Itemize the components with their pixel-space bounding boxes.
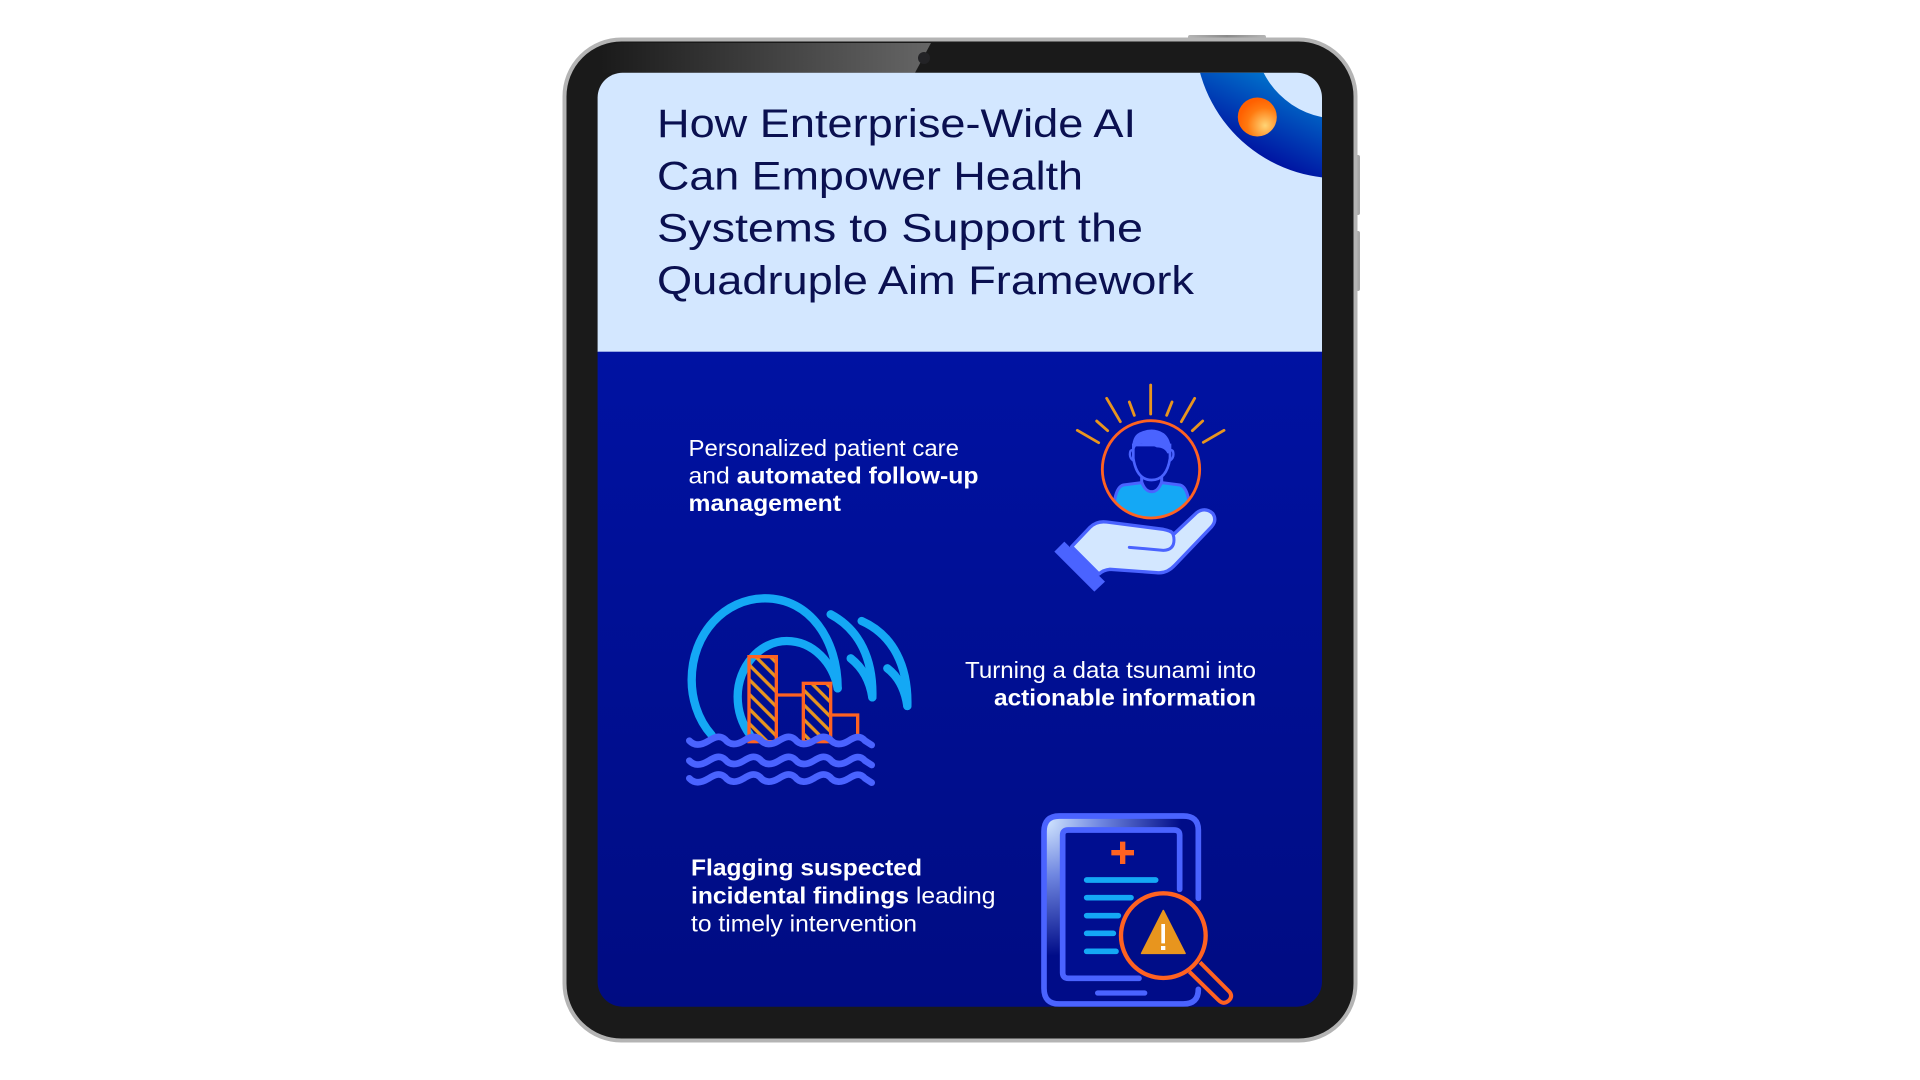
text block: data tsunami bbox=[965, 657, 1256, 710]
screen bbox=[598, 72, 1322, 1007]
finger line bbox=[1129, 531, 1174, 550]
warning triangle bbox=[1142, 911, 1185, 953]
cuff bbox=[1054, 542, 1105, 592]
document interior bbox=[1066, 832, 1174, 948]
magnifier handle bbox=[1189, 962, 1231, 1003]
tablet frame bbox=[1044, 816, 1198, 1004]
text block: personalized care: Personalized patient care bbox=[688, 435, 959, 461]
exclamation mark bbox=[1161, 924, 1165, 950]
person bbox=[1112, 430, 1192, 520]
text block: personalized care bbox=[688, 435, 978, 516]
bezel glare bbox=[572, 43, 931, 100]
blue content panel bbox=[597, 352, 1323, 1008]
document outline bbox=[1063, 830, 1180, 978]
icon: medical report with alert bbox=[1044, 816, 1231, 1004]
title: Quadruple Aim Framework bbox=[657, 259, 1195, 303]
title: Systems to Support the bbox=[657, 207, 1143, 251]
icon: data tsunami bbox=[689, 598, 907, 783]
tablet frame glow bbox=[1046, 818, 1175, 952]
big wave bbox=[692, 598, 907, 735]
text block: data tsunami: actionable information bbox=[994, 684, 1256, 710]
text block: incidental findings bbox=[691, 854, 996, 936]
volume down button bbox=[1354, 231, 1360, 291]
title: How Enterprise-Wide AI bbox=[657, 102, 1136, 146]
tablet bezel bbox=[564, 40, 1356, 1040]
rays bbox=[1077, 385, 1224, 443]
text block: personalized care: management bbox=[688, 490, 841, 516]
title: Can Empower Health bbox=[657, 154, 1083, 198]
text block: data tsunami: Turning a data tsunami into bbox=[965, 657, 1256, 683]
text block: personalized care: and automated follow-up bbox=[688, 462, 978, 488]
circle outline bbox=[1102, 421, 1200, 518]
top power button bbox=[1188, 35, 1266, 41]
hand bbox=[1072, 510, 1215, 574]
buildings bbox=[749, 657, 858, 742]
text block: incidental findings: to timely intervention bbox=[691, 910, 917, 936]
camera bbox=[918, 52, 930, 64]
title bbox=[657, 102, 1195, 303]
volume up button bbox=[1354, 155, 1360, 215]
magnifier lens bbox=[1121, 893, 1206, 978]
orange dot bbox=[1238, 98, 1277, 136]
document lines bbox=[1087, 880, 1156, 951]
text block: incidental findings: Flagging suspected bbox=[691, 854, 922, 880]
header panel bbox=[597, 72, 1323, 352]
home bar bbox=[1095, 990, 1148, 996]
decorative ring bbox=[1200, 72, 1322, 178]
icon: patient in hand bbox=[1054, 385, 1224, 592]
tablet device bbox=[564, 35, 1360, 1040]
medical cross bbox=[1111, 842, 1134, 864]
text block: incidental findings: incidental findings leading bbox=[691, 882, 996, 908]
water waves bbox=[689, 737, 872, 783]
